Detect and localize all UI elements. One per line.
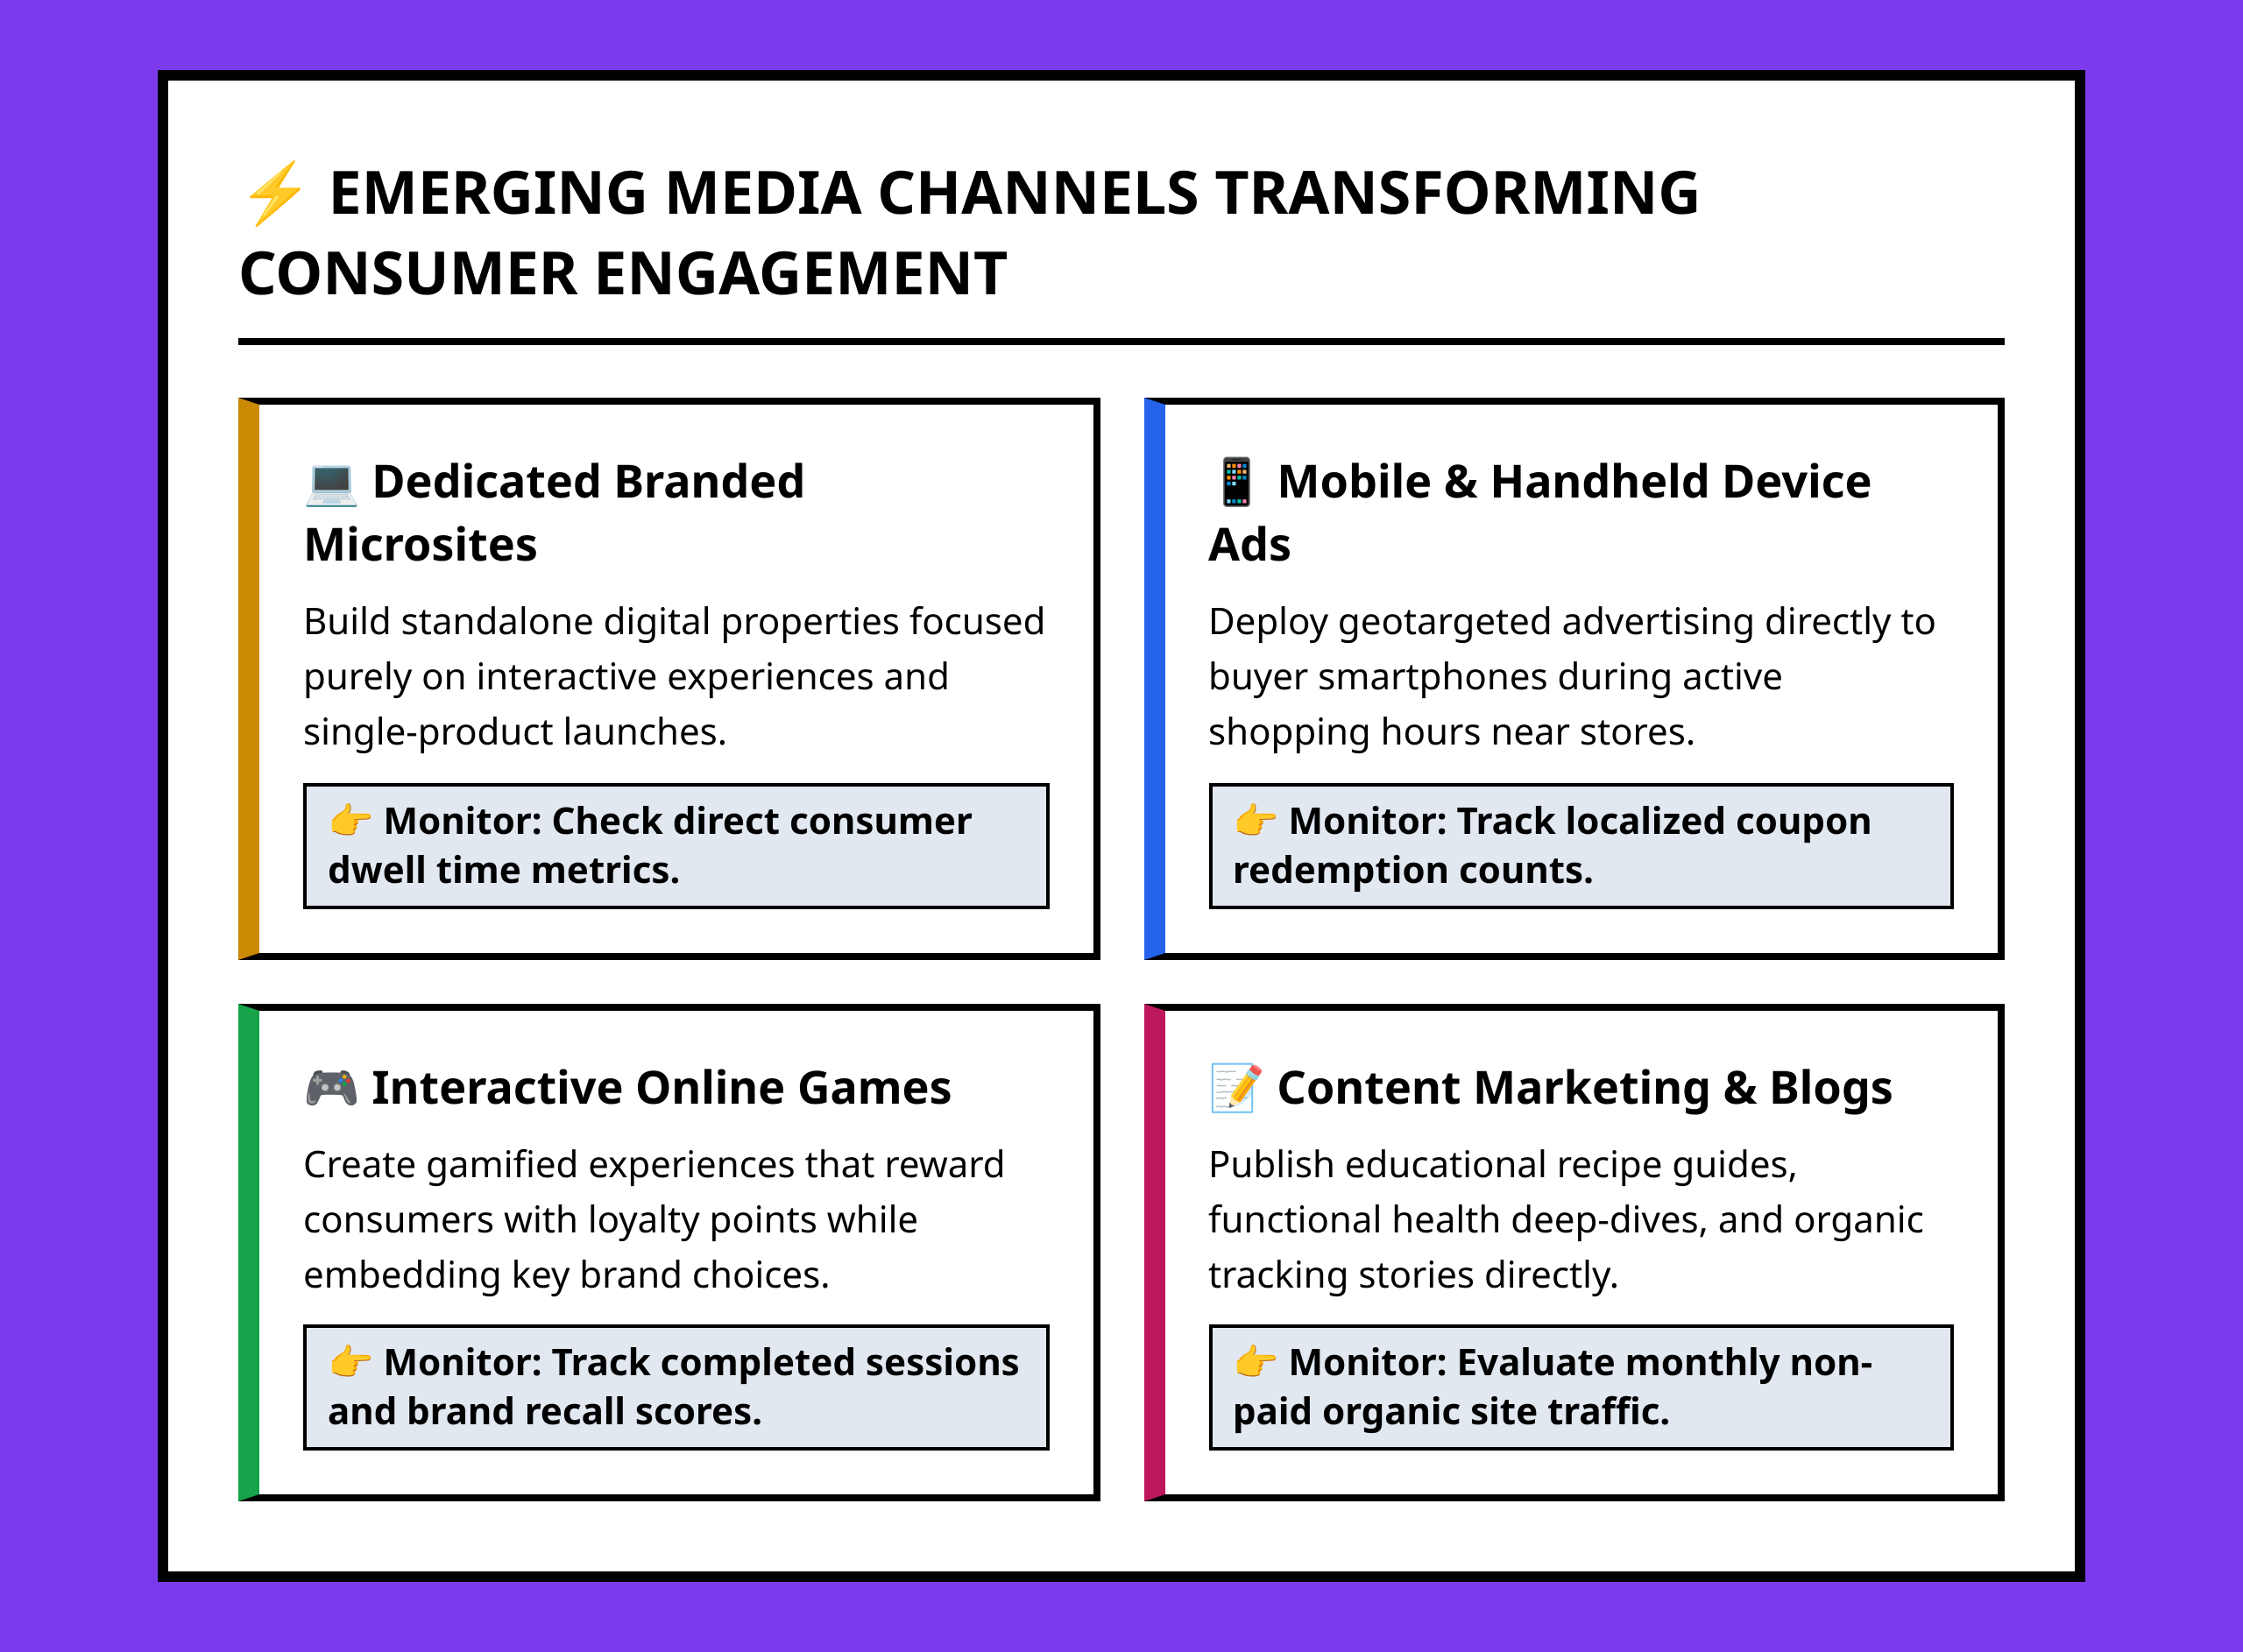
callout: games monitor xyxy=(303,1324,1050,1451)
text: microsites description xyxy=(303,596,1045,756)
panel: content marketing and blogs xyxy=(1144,1004,2005,1501)
text: content description xyxy=(1208,1139,1924,1299)
callout: content monitor: 👉 Monitor: Evaluate monthly non- xyxy=(1233,1337,1872,1387)
title xyxy=(238,149,1702,312)
callout: microsites monitor: 👉 Monitor: Check direct consumer xyxy=(328,795,973,845)
heading: games: 🎮 Interactive Online Games xyxy=(303,1055,952,1118)
callout: mobile monitor: redemption counts. xyxy=(1233,844,1594,894)
heading: microsites xyxy=(303,449,805,575)
callout: games monitor: and brand recall scores. xyxy=(328,1386,762,1436)
title: ⚡ EMERGING MEDIA CHANNELS TRANSFORMING xyxy=(238,149,1702,231)
text: games description: Create gamified experiences that reward xyxy=(303,1139,1006,1189)
text: mobile description: Deploy geotargeted advertising directly to xyxy=(1208,596,1936,646)
title divider xyxy=(238,338,2005,345)
panel: interactive online games xyxy=(238,1004,1100,1501)
panel: mobile and handheld device ads xyxy=(1144,398,2005,960)
callout: mobile monitor xyxy=(1209,783,1954,909)
text: content description: tracking stories directly. xyxy=(1208,1249,1619,1299)
text: microsites description: purely on interactive experiences and xyxy=(303,651,950,701)
text: mobile description: buyer smartphones during active xyxy=(1208,651,1783,701)
text: mobile description xyxy=(1208,596,1936,756)
text: microsites description: Build standalone digital properties focused xyxy=(303,596,1045,646)
title: CONSUMER ENGAGEMENT xyxy=(238,229,1008,312)
heading: mobile: Ads xyxy=(1208,512,1291,575)
heading: mobile: 📱 Mobile & Handheld Device xyxy=(1208,449,1872,512)
text: games description xyxy=(303,1139,1006,1299)
text: content description: Publish educational recipe guides, xyxy=(1208,1139,1798,1189)
heading: microsites: Microsites xyxy=(303,512,538,575)
text: content description: functional health deep-dives, and organic xyxy=(1208,1194,1924,1244)
panel: dedicated branded microsites xyxy=(238,398,1100,960)
callout: microsites monitor: dwell time metrics. xyxy=(328,844,680,894)
callout: microsites monitor xyxy=(303,783,1050,909)
callout: games monitor: 👉 Monitor: Track completed sessions xyxy=(328,1337,1020,1387)
main panel xyxy=(158,70,2085,1582)
text: microsites description: single-product launches. xyxy=(303,706,727,756)
text: games description: embedding key brand choices. xyxy=(303,1249,830,1299)
heading: mobile xyxy=(1208,449,1872,575)
callout: content monitor xyxy=(1209,1324,1954,1451)
text: games description: consumers with loyalty points while xyxy=(303,1194,918,1244)
text: mobile description: shopping hours near stores. xyxy=(1208,706,1695,756)
callout: mobile monitor: 👉 Monitor: Track localized coupon xyxy=(1233,795,1872,845)
heading: content marketing: 📝 Content Marketing & Blogs xyxy=(1208,1055,1893,1118)
heading: microsites: 💻 Dedicated Branded xyxy=(303,449,805,512)
callout: content monitor: paid organic site traffic. xyxy=(1233,1386,1670,1436)
